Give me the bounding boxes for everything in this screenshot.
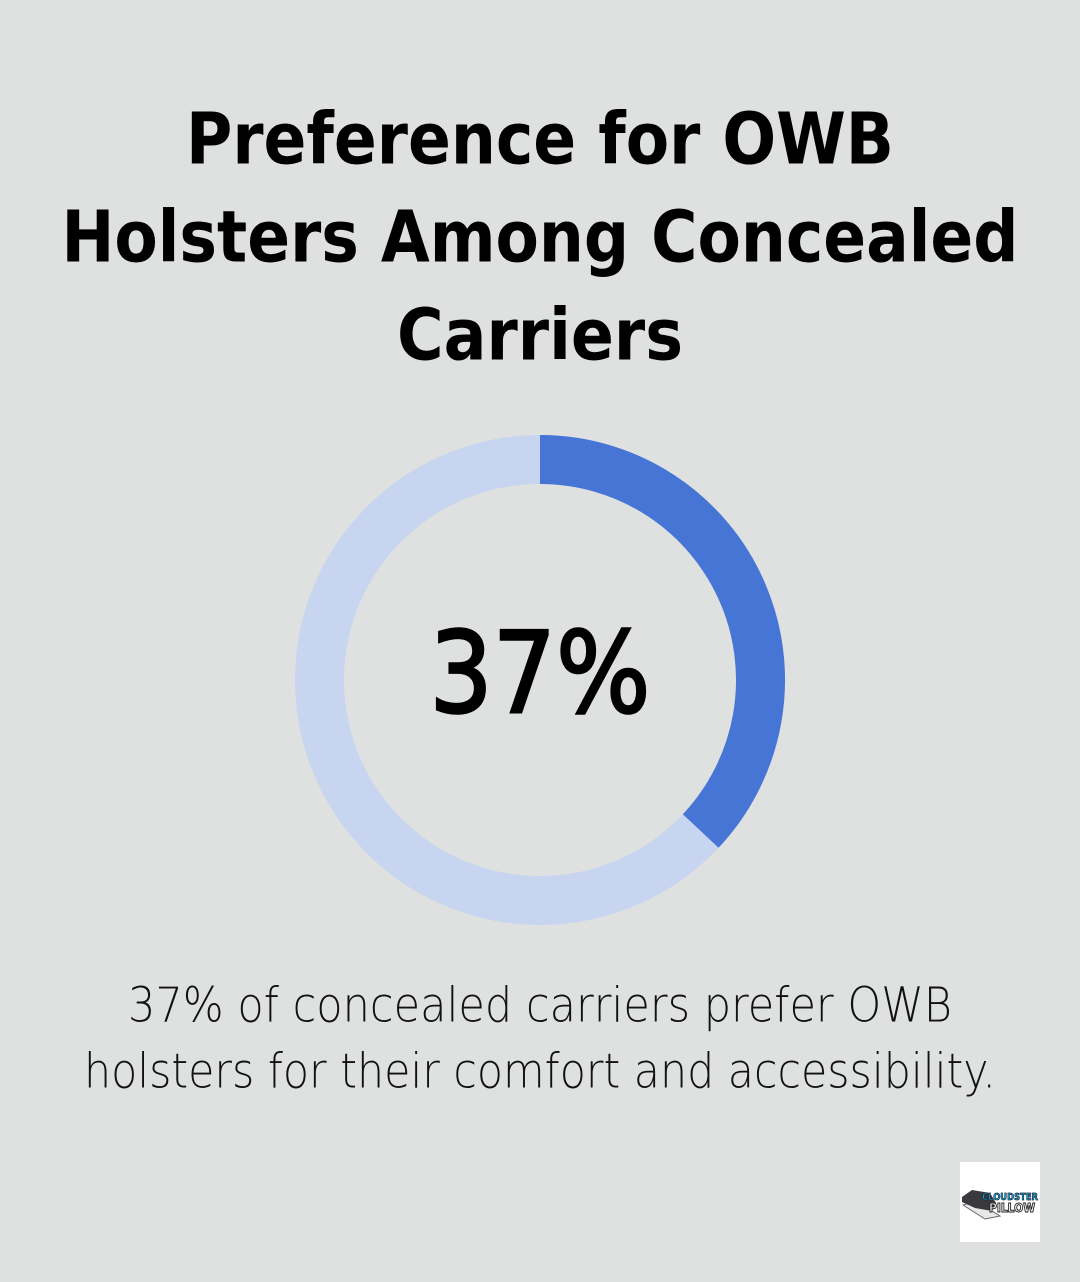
description text: [84, 978, 996, 1100]
logo: [960, 1162, 1040, 1242]
title: Carriers: [397, 294, 683, 376]
center value: 37%: [430, 609, 650, 739]
title: Preference for OWB: [186, 98, 894, 180]
title: [62, 98, 1018, 376]
description text: 37% of concealed carriers prefer OWB: [128, 978, 952, 1034]
logo: CLOUDSTER: [982, 1192, 1038, 1203]
logo: PILLOW: [989, 1201, 1035, 1215]
donut chart: 37%: [320, 460, 761, 900]
description text: holsters for their comfort and accessibility.: [84, 1044, 996, 1100]
